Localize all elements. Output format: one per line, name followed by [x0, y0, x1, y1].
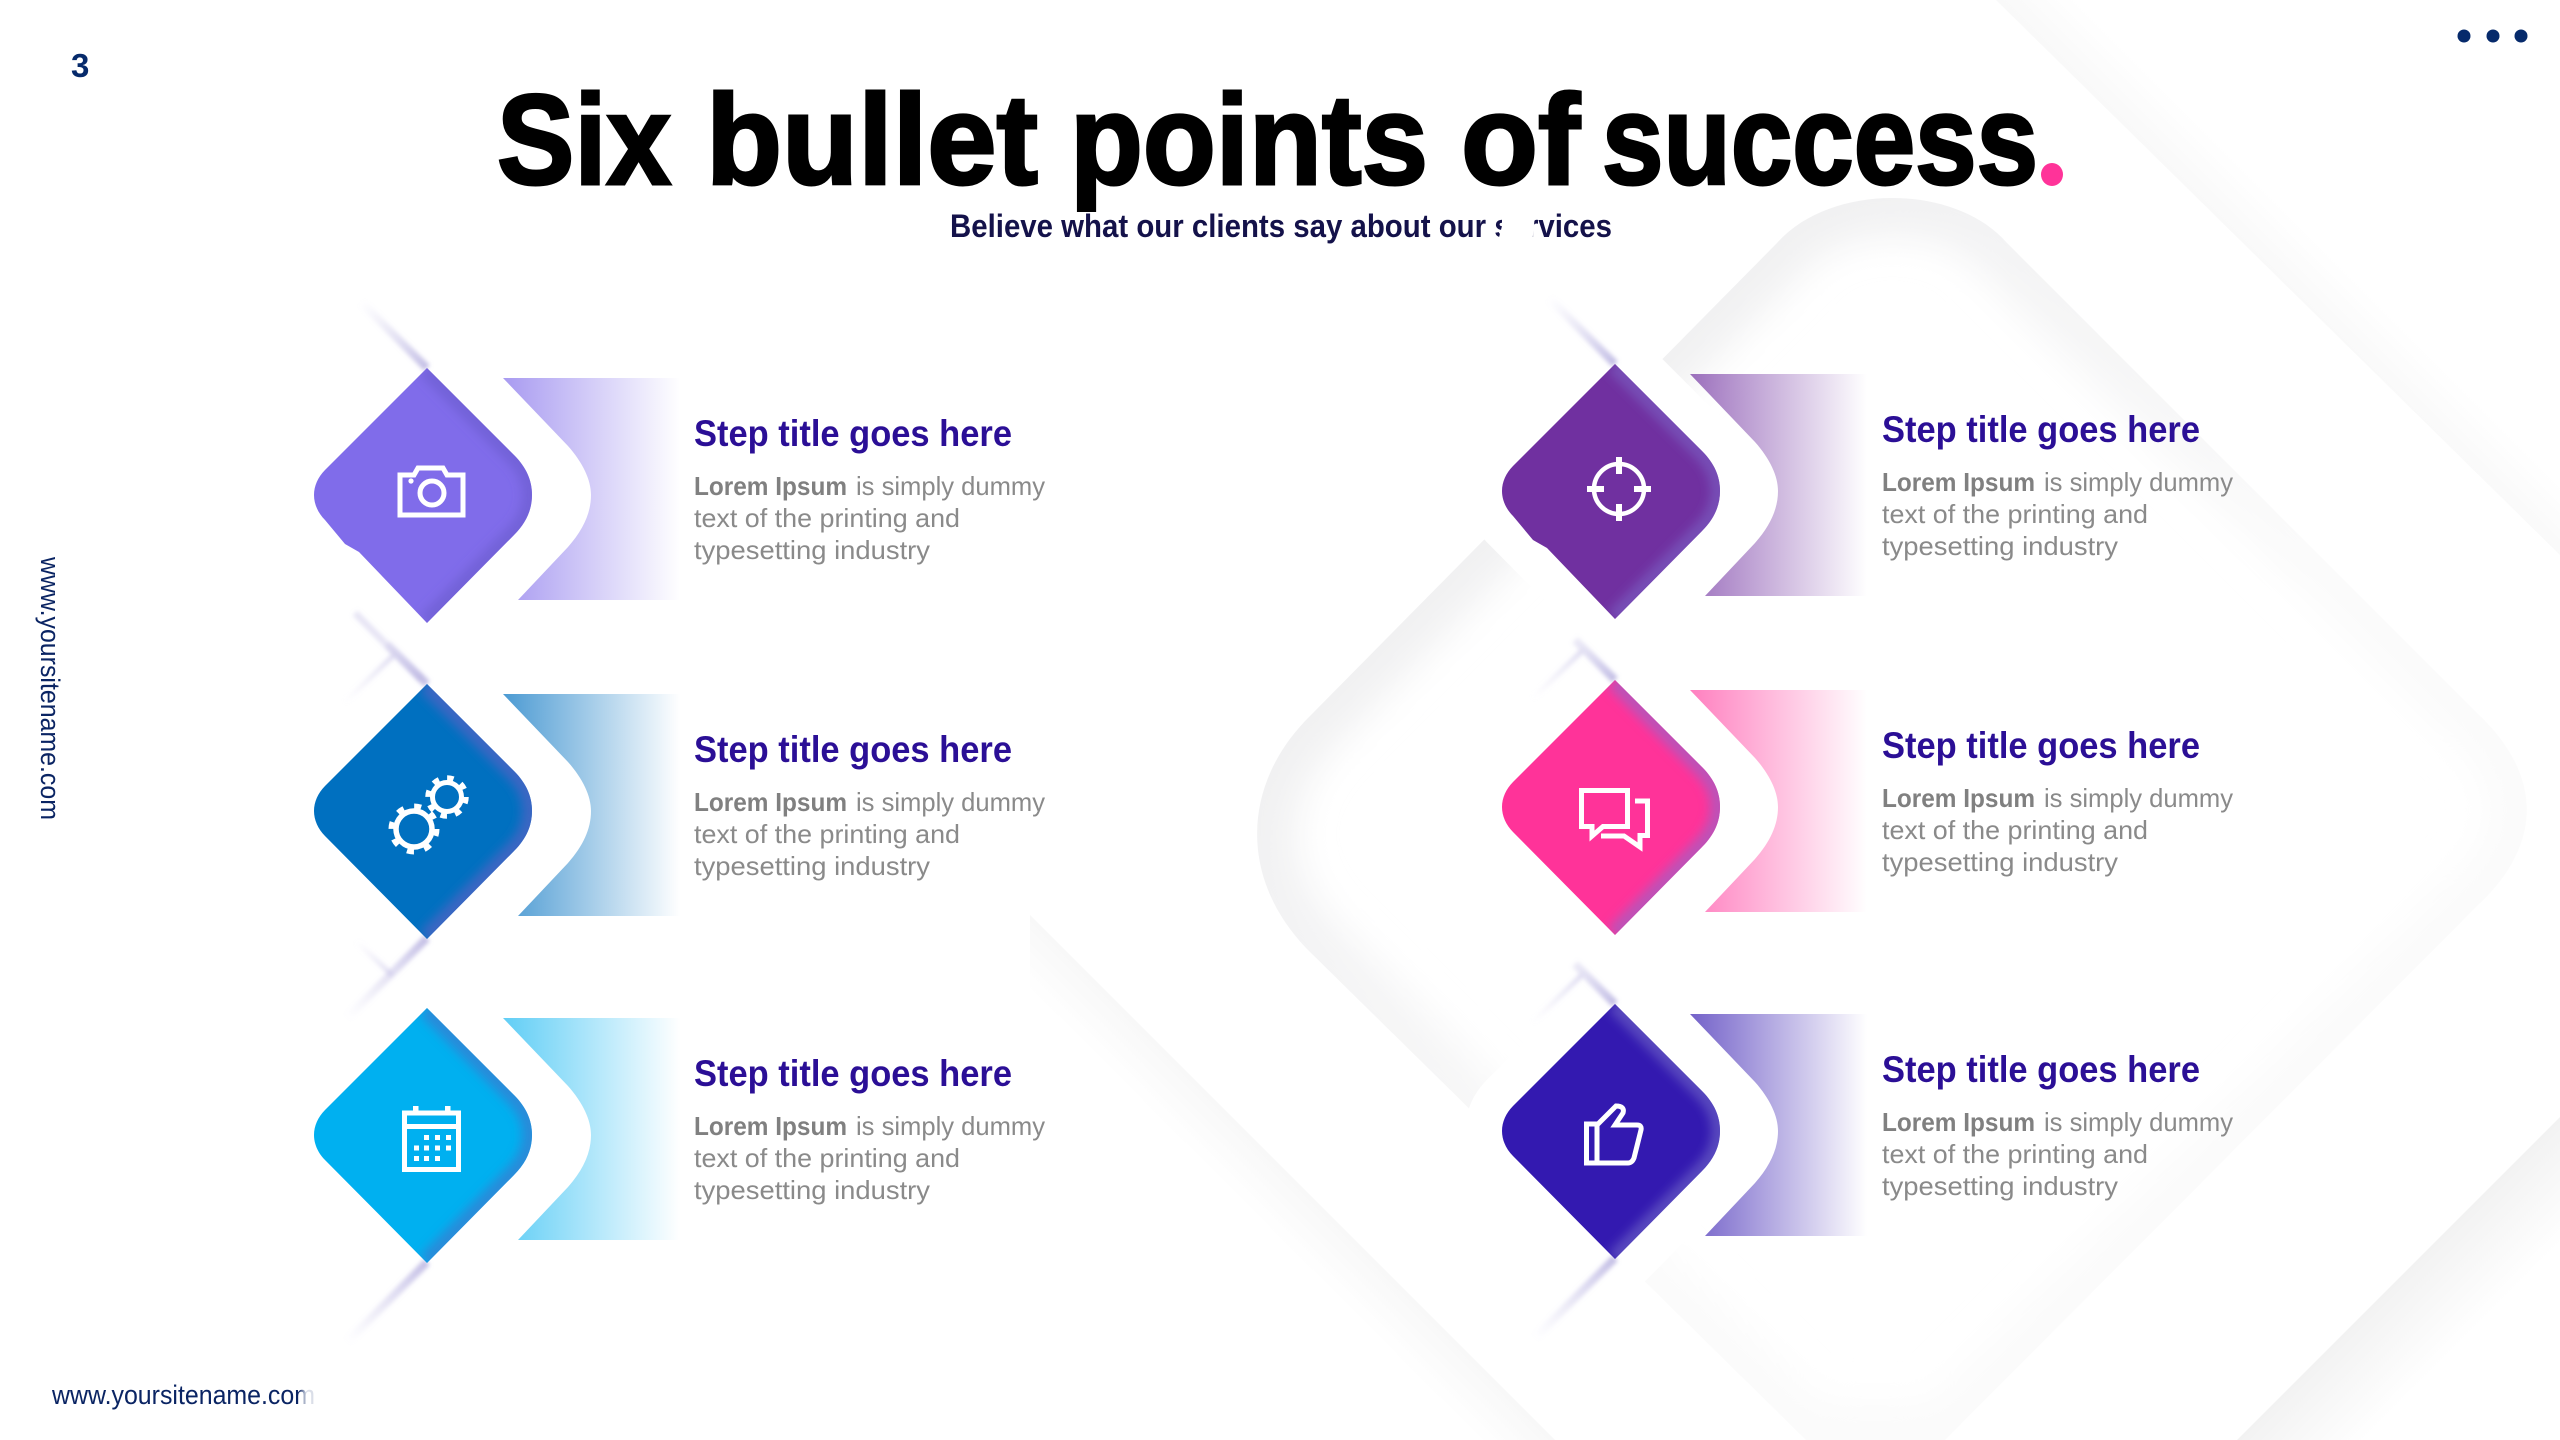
diamond 2 [314, 644, 532, 1018]
step 5 text [1882, 725, 2233, 877]
title: of [1461, 69, 1580, 212]
panel: step 4 [1502, 298, 2233, 619]
icon: camera [400, 468, 463, 515]
chevron 5 [1690, 690, 1867, 912]
background: soft rounded diamonds [1257, 198, 2560, 1440]
icon: chat bubbles [1582, 790, 1648, 847]
chevron 3 [503, 1018, 680, 1240]
panel: step 3 [314, 1008, 1045, 1342]
step 5 text: is simply dummy [2044, 783, 2233, 813]
icon: calendar [404, 1106, 458, 1170]
chevron 2 [503, 694, 680, 916]
icon: target [1587, 457, 1651, 521]
title [497, 69, 2066, 212]
step 6 text [1882, 1049, 2233, 1201]
title: success [1602, 69, 2038, 212]
white halos around diamonds [315, 364, 1720, 1263]
panel: step 5 [1502, 640, 2233, 935]
subtitle: Believe what our clients say about our services [950, 208, 1612, 244]
diamond 6 [1502, 964, 1720, 1338]
step 6 text: Step title goes here [1882, 1049, 2200, 1090]
step 5 text: Step title goes here [1882, 725, 2200, 766]
step 6 text: Lorem Ipsum [1882, 1107, 2035, 1137]
step 1 text: typesetting industry [694, 535, 930, 565]
menu dots [2458, 30, 2528, 42]
step 1 text [694, 413, 1045, 565]
step 5 text: text of the printing and [1882, 815, 2148, 845]
step 4 text: typesetting industry [1882, 531, 2118, 561]
footer url: www.yoursitename.com [51, 1380, 315, 1410]
step 5 text: typesetting industry [1882, 847, 2118, 877]
diamond 1 [314, 302, 532, 680]
step 1 text: is simply dummy [856, 471, 1045, 501]
title: bullet [706, 69, 1038, 212]
panel: step 1 [314, 302, 1045, 680]
step 2 text: Step title goes here [694, 729, 1012, 770]
step 2 text: text of the printing and [694, 819, 960, 849]
chevron 4 [1690, 374, 1867, 596]
step 3 text: text of the printing and [694, 1143, 960, 1173]
step 2 text [694, 729, 1045, 881]
step 1 text: text of the printing and [694, 503, 960, 533]
diamond 5 [1502, 640, 1720, 935]
title: Six [497, 69, 671, 212]
step 3 text [694, 1053, 1045, 1205]
step 2 text: typesetting industry [694, 851, 930, 881]
icon: gears [392, 778, 466, 852]
step 4 text: text of the printing and [1882, 499, 2148, 529]
panel: step 2 [314, 644, 1045, 1018]
page number: 3 [71, 47, 89, 84]
icon: thumbs up [1586, 1106, 1641, 1163]
chevron 6 [1690, 1014, 1867, 1236]
step 3 text: is simply dummy [856, 1111, 1045, 1141]
side url: www.yoursitename.com [35, 556, 65, 820]
step 4 text: Lorem Ipsum [1882, 467, 2035, 497]
step 4 text [1882, 409, 2233, 561]
step 6 text: text of the printing and [1882, 1139, 2148, 1169]
diamond 4 [1502, 298, 1720, 619]
step 1 text: Step title goes here [694, 413, 1012, 454]
step 6 text: is simply dummy [2044, 1107, 2233, 1137]
step 2 text: is simply dummy [856, 787, 1045, 817]
step 6 text: typesetting industry [1882, 1171, 2118, 1201]
step 5 text: Lorem Ipsum [1882, 783, 2035, 813]
step 3 text: Lorem Ipsum [694, 1111, 847, 1141]
title: . [2038, 92, 2066, 204]
chevron 1 [503, 378, 680, 600]
step 3 text: typesetting industry [694, 1175, 930, 1205]
step 1 text: Lorem Ipsum [694, 471, 847, 501]
diamond 3 [314, 1008, 532, 1342]
step 4 text: Step title goes here [1882, 409, 2200, 450]
title: points [1070, 69, 1428, 212]
step 4 text: is simply dummy [2044, 467, 2233, 497]
panel: step 6 [1502, 964, 2233, 1338]
step 2 text: Lorem Ipsum [694, 787, 847, 817]
step 3 text: Step title goes here [694, 1053, 1012, 1094]
